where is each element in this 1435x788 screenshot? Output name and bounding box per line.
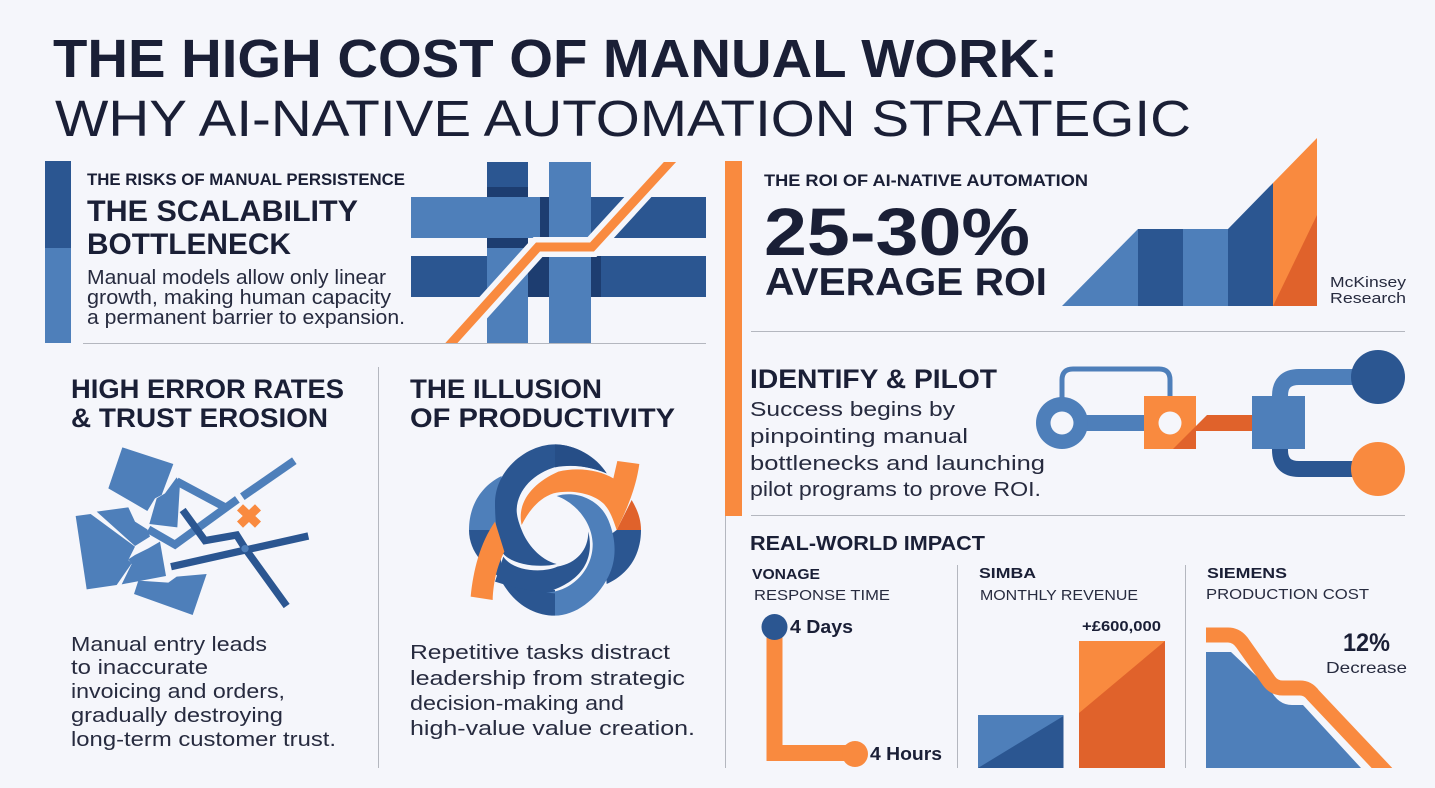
icon: process pipeline [1036,350,1405,496]
chart: cost decline [1206,635,1398,785]
title [53,30,1191,147]
body text: decision-making and [410,692,624,715]
heading: HIGH ERROR RATES [71,374,344,404]
heading: & TRUST EROSION [71,403,328,433]
body text: growth, making human capacity [87,287,391,309]
big stat: 25-30% [764,195,1030,270]
panel: identify and pilot [750,350,1405,501]
body text: Success begins by [750,398,956,421]
body text: to inaccurate [71,656,208,679]
panel: scalability bottleneck [45,156,706,349]
case: Simba: SIMBA [979,565,1036,582]
body text: a permanent barrier to expansion. [87,307,405,329]
body text: invoicing and orders, [71,680,285,703]
case: Siemens: SIEMENS [1207,565,1287,582]
body text: Repetitive tasks distract [410,641,670,664]
chart: rising ROI steps [1062,138,1317,306]
heading [410,374,675,433]
case: Vonage: VONAGE [752,566,820,583]
body text: pilot programs to prove ROI. [750,478,1041,501]
case: Simba: MONTHLY REVENUE [980,587,1138,604]
case: Siemens: Decrease [1326,660,1407,677]
body text [87,267,405,329]
icon: circular loop of ribbons [469,444,641,616]
body text [410,641,695,740]
source note: McKinsey [1330,274,1407,291]
accent bar [45,161,71,343]
body text: gradually destroying [71,704,283,727]
panel: real-world impact [750,532,1407,785]
title: THE HIGH COST OF MANUAL WORK: [53,30,1058,89]
heading: OF PRODUCTIVITY [410,403,675,433]
source note [1330,274,1407,307]
case: Simba: +£600,000 [1082,618,1161,635]
body text: Manual models allow only linear [87,267,386,289]
panel: ROI [764,138,1407,307]
orange divider bar [725,161,742,516]
heading [87,195,358,261]
chart: revenue bars [978,641,1165,768]
heading [71,374,344,433]
heading: REAL-WORLD IMPACT [750,532,985,555]
case: Siemens: PRODUCTION COST [1206,586,1369,603]
case: Vonage: RESPONSE TIME [754,587,890,604]
stat label: AVERAGE ROI [765,261,1047,304]
panel: illusion of productivity [410,374,695,740]
eyebrow heading: THE ROI OF AI-NATIVE AUTOMATION [764,171,1088,190]
heading: THE ILLUSION [410,374,602,404]
title: WHY AI-NATIVE AUTOMATION STRATEGIC [55,90,1191,147]
body text: high-value value creation. [410,717,695,740]
heading: THE SCALABILITY [87,195,358,228]
body text: bottlenecks and launching [750,452,1045,475]
icon: shattered shards and broken lines [76,447,308,615]
icon: woven bars with orange line [411,156,706,349]
case: Siemens [1206,565,1407,785]
case: Simba [978,565,1165,768]
body text: Manual entry leads [71,633,267,656]
body text: long-term customer trust. [71,728,336,751]
case: Siemens: 12% [1343,629,1390,657]
panel: high error rates [71,374,344,751]
source note: Research [1330,290,1406,307]
eyebrow heading: THE RISKS OF MANUAL PERSISTENCE [87,171,405,189]
body text [71,633,336,751]
heading: IDENTIFY & PILOT [750,364,998,394]
case: Vonage [752,566,942,767]
body text: leadership from strategic [410,667,685,690]
case: Vonage: 4 Days [790,617,853,637]
case: Vonage: 4 Hours [870,744,942,764]
body text: pinpointing manual [750,425,968,448]
body text [750,398,1045,501]
chart: response time drop [762,614,868,767]
heading: BOTTLENECK [87,228,291,261]
